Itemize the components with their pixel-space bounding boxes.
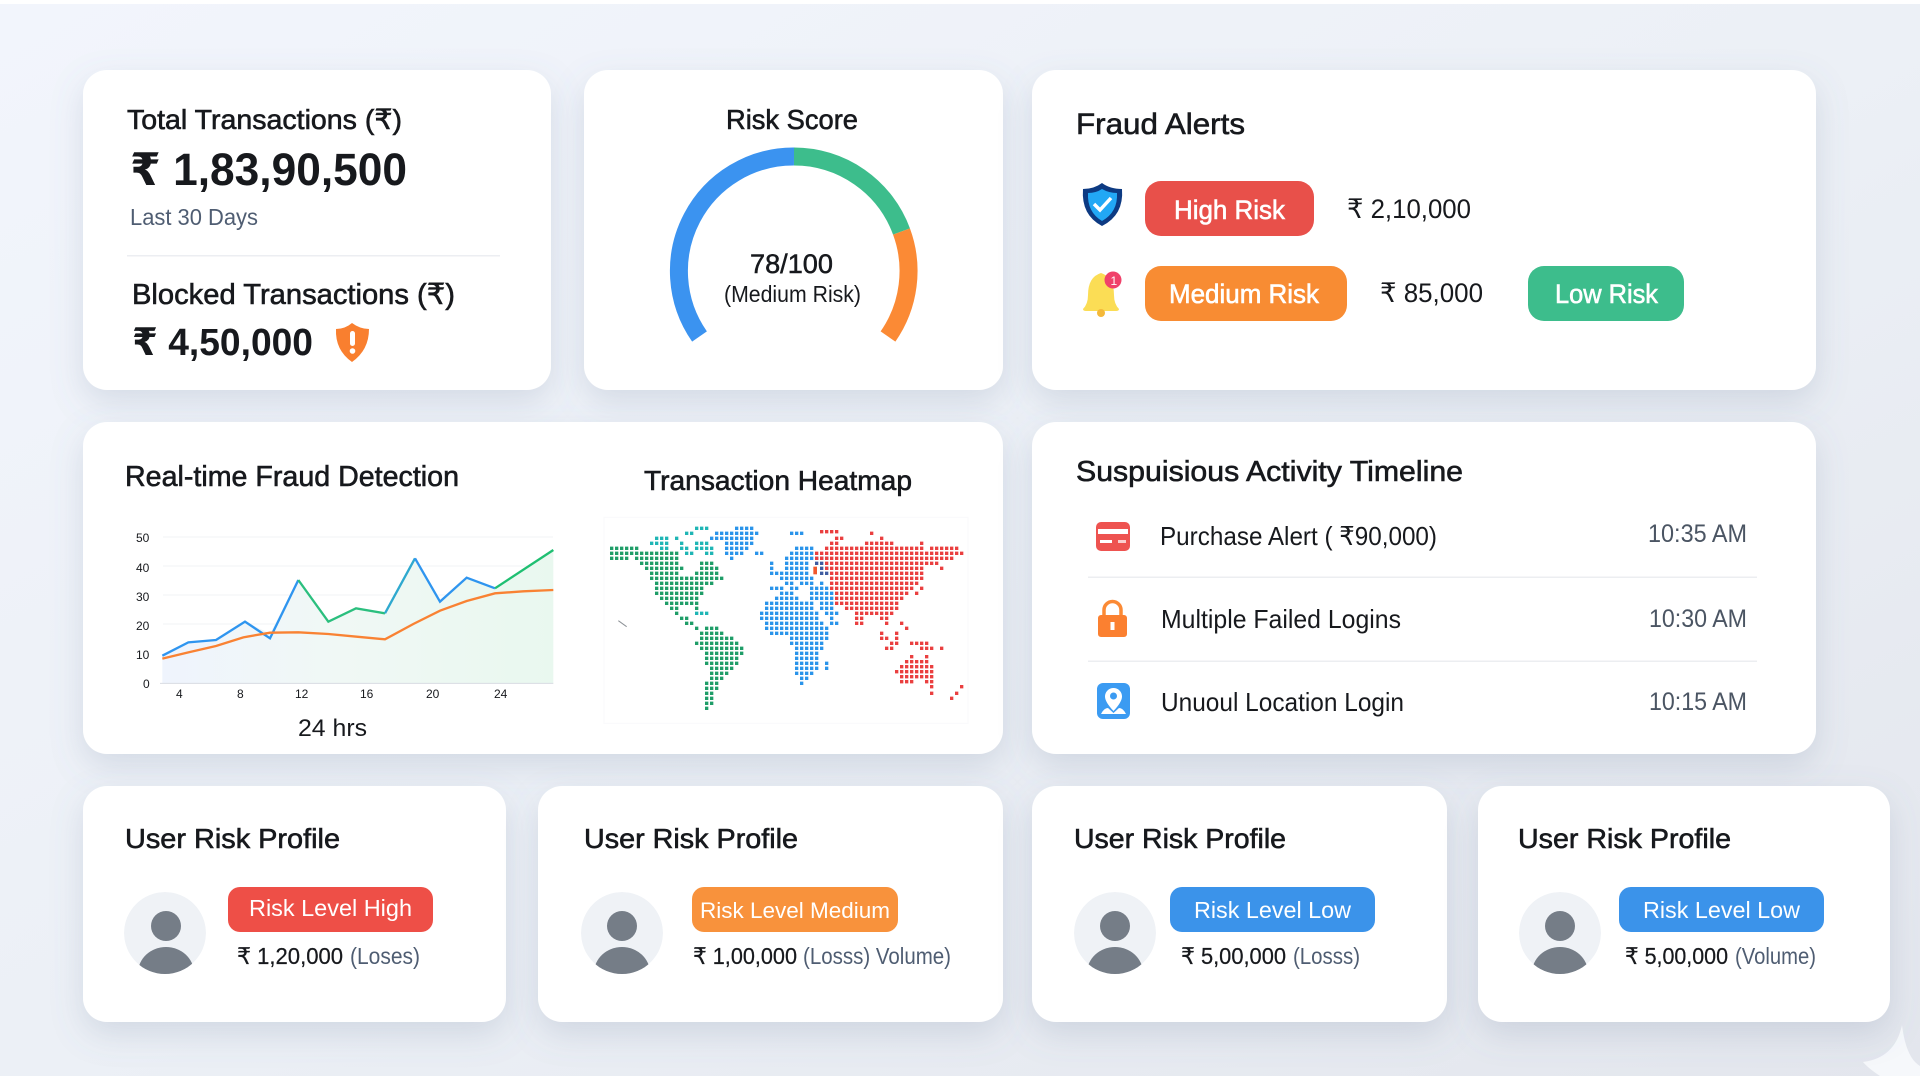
medium risk amount: ₹ 85,000 bbox=[1380, 278, 1483, 308]
panel: fraud alerts bbox=[1032, 70, 1816, 390]
heading: User Risk Profile bbox=[1518, 823, 1731, 854]
avatar bbox=[1519, 892, 1601, 974]
timestamp: 10:30 AM bbox=[1649, 605, 1747, 633]
amount: ₹ 5,00,000 bbox=[1625, 943, 1728, 969]
timestamp: 10:15 AM bbox=[1649, 688, 1747, 716]
line chart bbox=[136, 531, 553, 701]
icon: credit card bbox=[1096, 522, 1130, 551]
amount: ₹ 1,20,000 bbox=[237, 943, 343, 969]
line chart: 0 bbox=[143, 677, 150, 691]
note: (Losss) Volume) bbox=[803, 943, 951, 969]
badge: high risk: High Risk bbox=[1174, 195, 1285, 225]
stray gray mark bbox=[618, 621, 627, 627]
icon: corner sparkle bbox=[1863, 1025, 1920, 1076]
avatar bbox=[581, 892, 663, 974]
line chart: 8 bbox=[237, 687, 244, 701]
badge: medium risk: Medium Risk bbox=[1169, 279, 1319, 309]
line chart: 4 bbox=[176, 687, 183, 701]
badge: Risk Level Low bbox=[1643, 897, 1800, 923]
heading: risk score: Risk Score bbox=[726, 104, 858, 135]
badge bbox=[1170, 887, 1375, 932]
heading: User Risk Profile bbox=[584, 823, 798, 854]
heatmap world map bbox=[604, 517, 968, 723]
panel: fraud detection and heatmap bbox=[83, 422, 1003, 754]
timeline item: purchase alert: Purchase Alert ( ₹90,000) bbox=[1160, 521, 1437, 551]
note: (Volume) bbox=[1735, 943, 1816, 969]
panel: user risk profile low volume bbox=[1478, 786, 1890, 1022]
line chart: 24 bbox=[494, 687, 508, 701]
line chart: 10 bbox=[136, 648, 150, 662]
badge: high risk bbox=[1145, 181, 1314, 236]
heading: blocked transactions: Blocked Transactions (₹) bbox=[132, 279, 455, 311]
icon: orange warning shield bbox=[336, 323, 369, 362]
amount: ₹ 5,00,000 bbox=[1181, 943, 1286, 969]
note: (Loses) bbox=[350, 943, 420, 969]
blocked transactions value: ₹ 4,50,000 bbox=[132, 322, 313, 364]
badge bbox=[228, 887, 433, 932]
avatar bbox=[124, 892, 206, 974]
high risk amount: ₹ 2,10,000 bbox=[1347, 194, 1471, 224]
icon: alert bell bbox=[1083, 272, 1122, 317]
line chart: 50 bbox=[136, 531, 150, 545]
line chart: 20 bbox=[136, 619, 150, 633]
gauge bbox=[679, 156, 909, 336]
panel: user risk profile medium bbox=[538, 786, 1003, 1022]
heading: real-time fraud detection: Real-time Fraud Detection bbox=[125, 461, 459, 493]
line chart: 12 bbox=[295, 687, 309, 701]
icon: alert bell: 1 bbox=[1110, 274, 1118, 288]
amount: ₹ 1,00,000 bbox=[693, 943, 797, 969]
line chart: 20 bbox=[426, 687, 440, 701]
heading: User Risk Profile bbox=[125, 823, 340, 854]
badge: Risk Level High bbox=[249, 895, 412, 921]
hotspot dot bbox=[813, 567, 817, 574]
timestamp: 10:35 AM bbox=[1648, 520, 1747, 548]
asia and oceania dots bbox=[815, 532, 965, 698]
panel: user risk profile high bbox=[83, 786, 506, 1022]
badge bbox=[692, 887, 898, 932]
timeline item: failed logins: Multiple Failed Logins bbox=[1161, 604, 1401, 634]
chart axis caption: 24 hrs bbox=[298, 715, 367, 742]
note: (Losss) bbox=[1293, 943, 1360, 969]
heading: User Risk Profile bbox=[1074, 823, 1286, 854]
line chart: 16 bbox=[360, 687, 374, 701]
total transactions value: ₹ 1,83,90,500 bbox=[130, 144, 407, 195]
greenland and africa-europe dots bbox=[710, 528, 840, 683]
timeline item: unusual location: Unuoul Location Login bbox=[1161, 687, 1404, 717]
badge bbox=[1619, 887, 1824, 932]
eastern europe dark dots bbox=[815, 558, 830, 573]
panel: transactions summary bbox=[83, 70, 551, 390]
avatar bbox=[1074, 892, 1156, 974]
americas dots bbox=[610, 548, 745, 708]
heading: fraud alerts: Fraud Alerts bbox=[1076, 108, 1245, 141]
badge: Risk Level Medium bbox=[700, 898, 890, 923]
line chart: 40 bbox=[136, 561, 150, 575]
heading: transaction heatmap: Transaction Heatmap bbox=[644, 465, 912, 496]
badge: medium risk bbox=[1145, 266, 1347, 321]
gauge score: 78/100 bbox=[750, 249, 833, 279]
panel: suspicious activity timeline bbox=[1032, 422, 1816, 754]
panel: user risk profile low loss bbox=[1032, 786, 1447, 1022]
arctic and caribbean dots bbox=[650, 528, 715, 613]
icon: location pin bbox=[1097, 683, 1130, 719]
icon: padlock bbox=[1098, 602, 1127, 637]
heading: timeline: Suspuisious Activity Timeline bbox=[1076, 456, 1463, 488]
period label: Last 30 Days bbox=[130, 204, 258, 230]
badge: low risk: Low Risk bbox=[1555, 279, 1658, 309]
icon: blue shield bbox=[1083, 183, 1122, 226]
badge: Risk Level Low bbox=[1194, 897, 1351, 923]
gauge label: (Medium Risk) bbox=[724, 281, 861, 307]
line chart: 30 bbox=[136, 590, 150, 604]
heading: total transactions: Total Transactions (₹) bbox=[127, 104, 402, 135]
badge: low risk bbox=[1528, 266, 1684, 321]
panel: risk score bbox=[584, 70, 1003, 390]
